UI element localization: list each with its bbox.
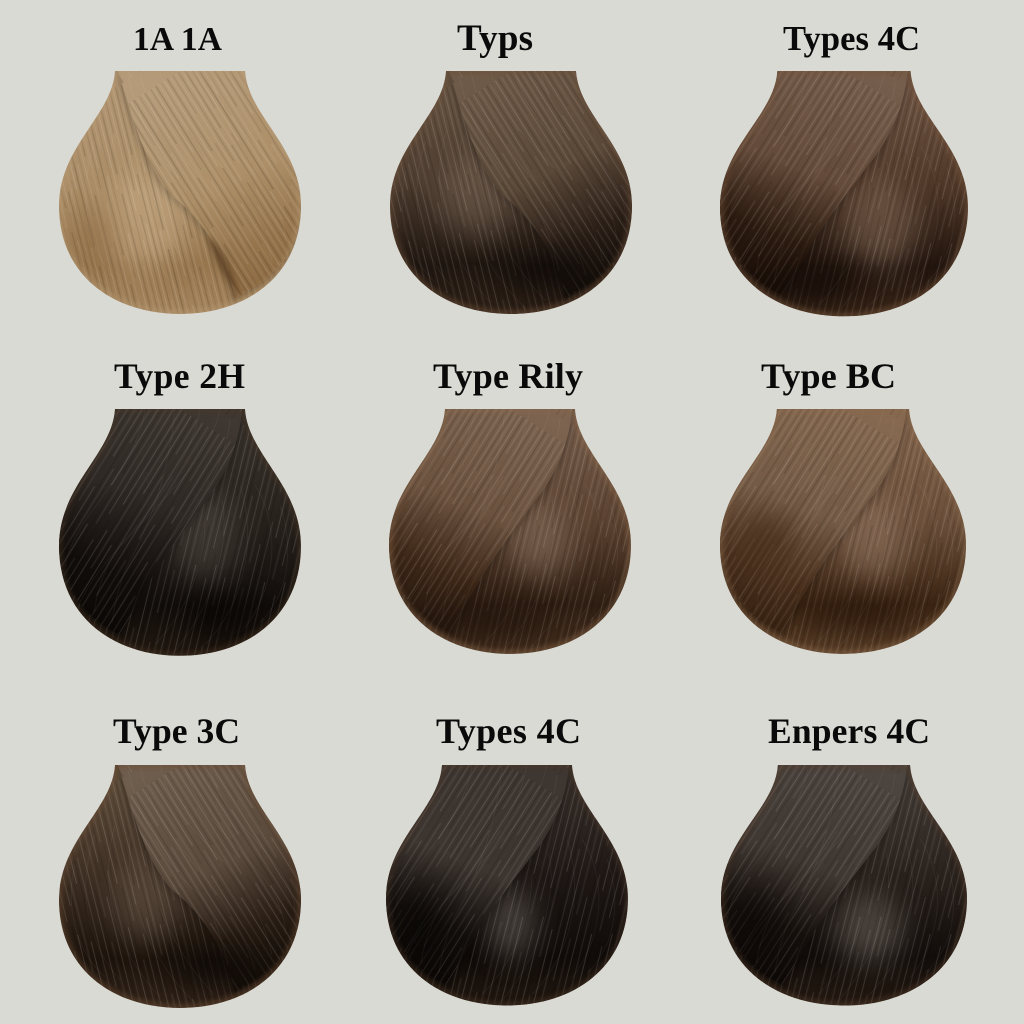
hair swatch: light chestnut [720, 409, 966, 654]
heading: Typs: Typs [457, 18, 533, 59]
panel: swatch Types 4C top [720, 20, 968, 316]
heading: Type 3C: Type 3C [113, 711, 240, 751]
hair swatch: dark cool brown [721, 765, 967, 1006]
hair swatch: espresso black [386, 765, 628, 1006]
heading: Types 4C: Types 4C [436, 711, 581, 751]
heading: 1A 1A: 1A 1A [133, 21, 222, 58]
hair swatch: medium dark brown [390, 71, 632, 314]
panel: swatch Enpers 4C [721, 711, 967, 1006]
panel: swatch Type 2H [59, 356, 301, 656]
panel: swatch Type Rily [389, 356, 631, 654]
panel: swatch Types 4C bottom [386, 711, 628, 1006]
hair swatch: golden blonde [59, 71, 301, 314]
panel: swatch Type 3C [59, 711, 301, 1008]
panel: swatch 1A 1A [59, 21, 301, 314]
heading: Enpers 4C: Enpers 4C [768, 711, 930, 751]
heading: Types 4C: Types 4C [783, 20, 920, 58]
heading: Type Rily: Type Rily [433, 356, 583, 396]
panel: swatch Type BC [720, 356, 966, 654]
hair swatch: warm brown [720, 71, 968, 316]
hair swatch: near black [59, 409, 301, 656]
hair swatch: dark ash brown [59, 765, 301, 1008]
hair swatch: chestnut brown [389, 409, 631, 654]
heading: Type BC: Type BC [761, 356, 896, 396]
heading: Type 2H: Type 2H [114, 356, 245, 396]
panel: swatch Typs [390, 18, 632, 314]
